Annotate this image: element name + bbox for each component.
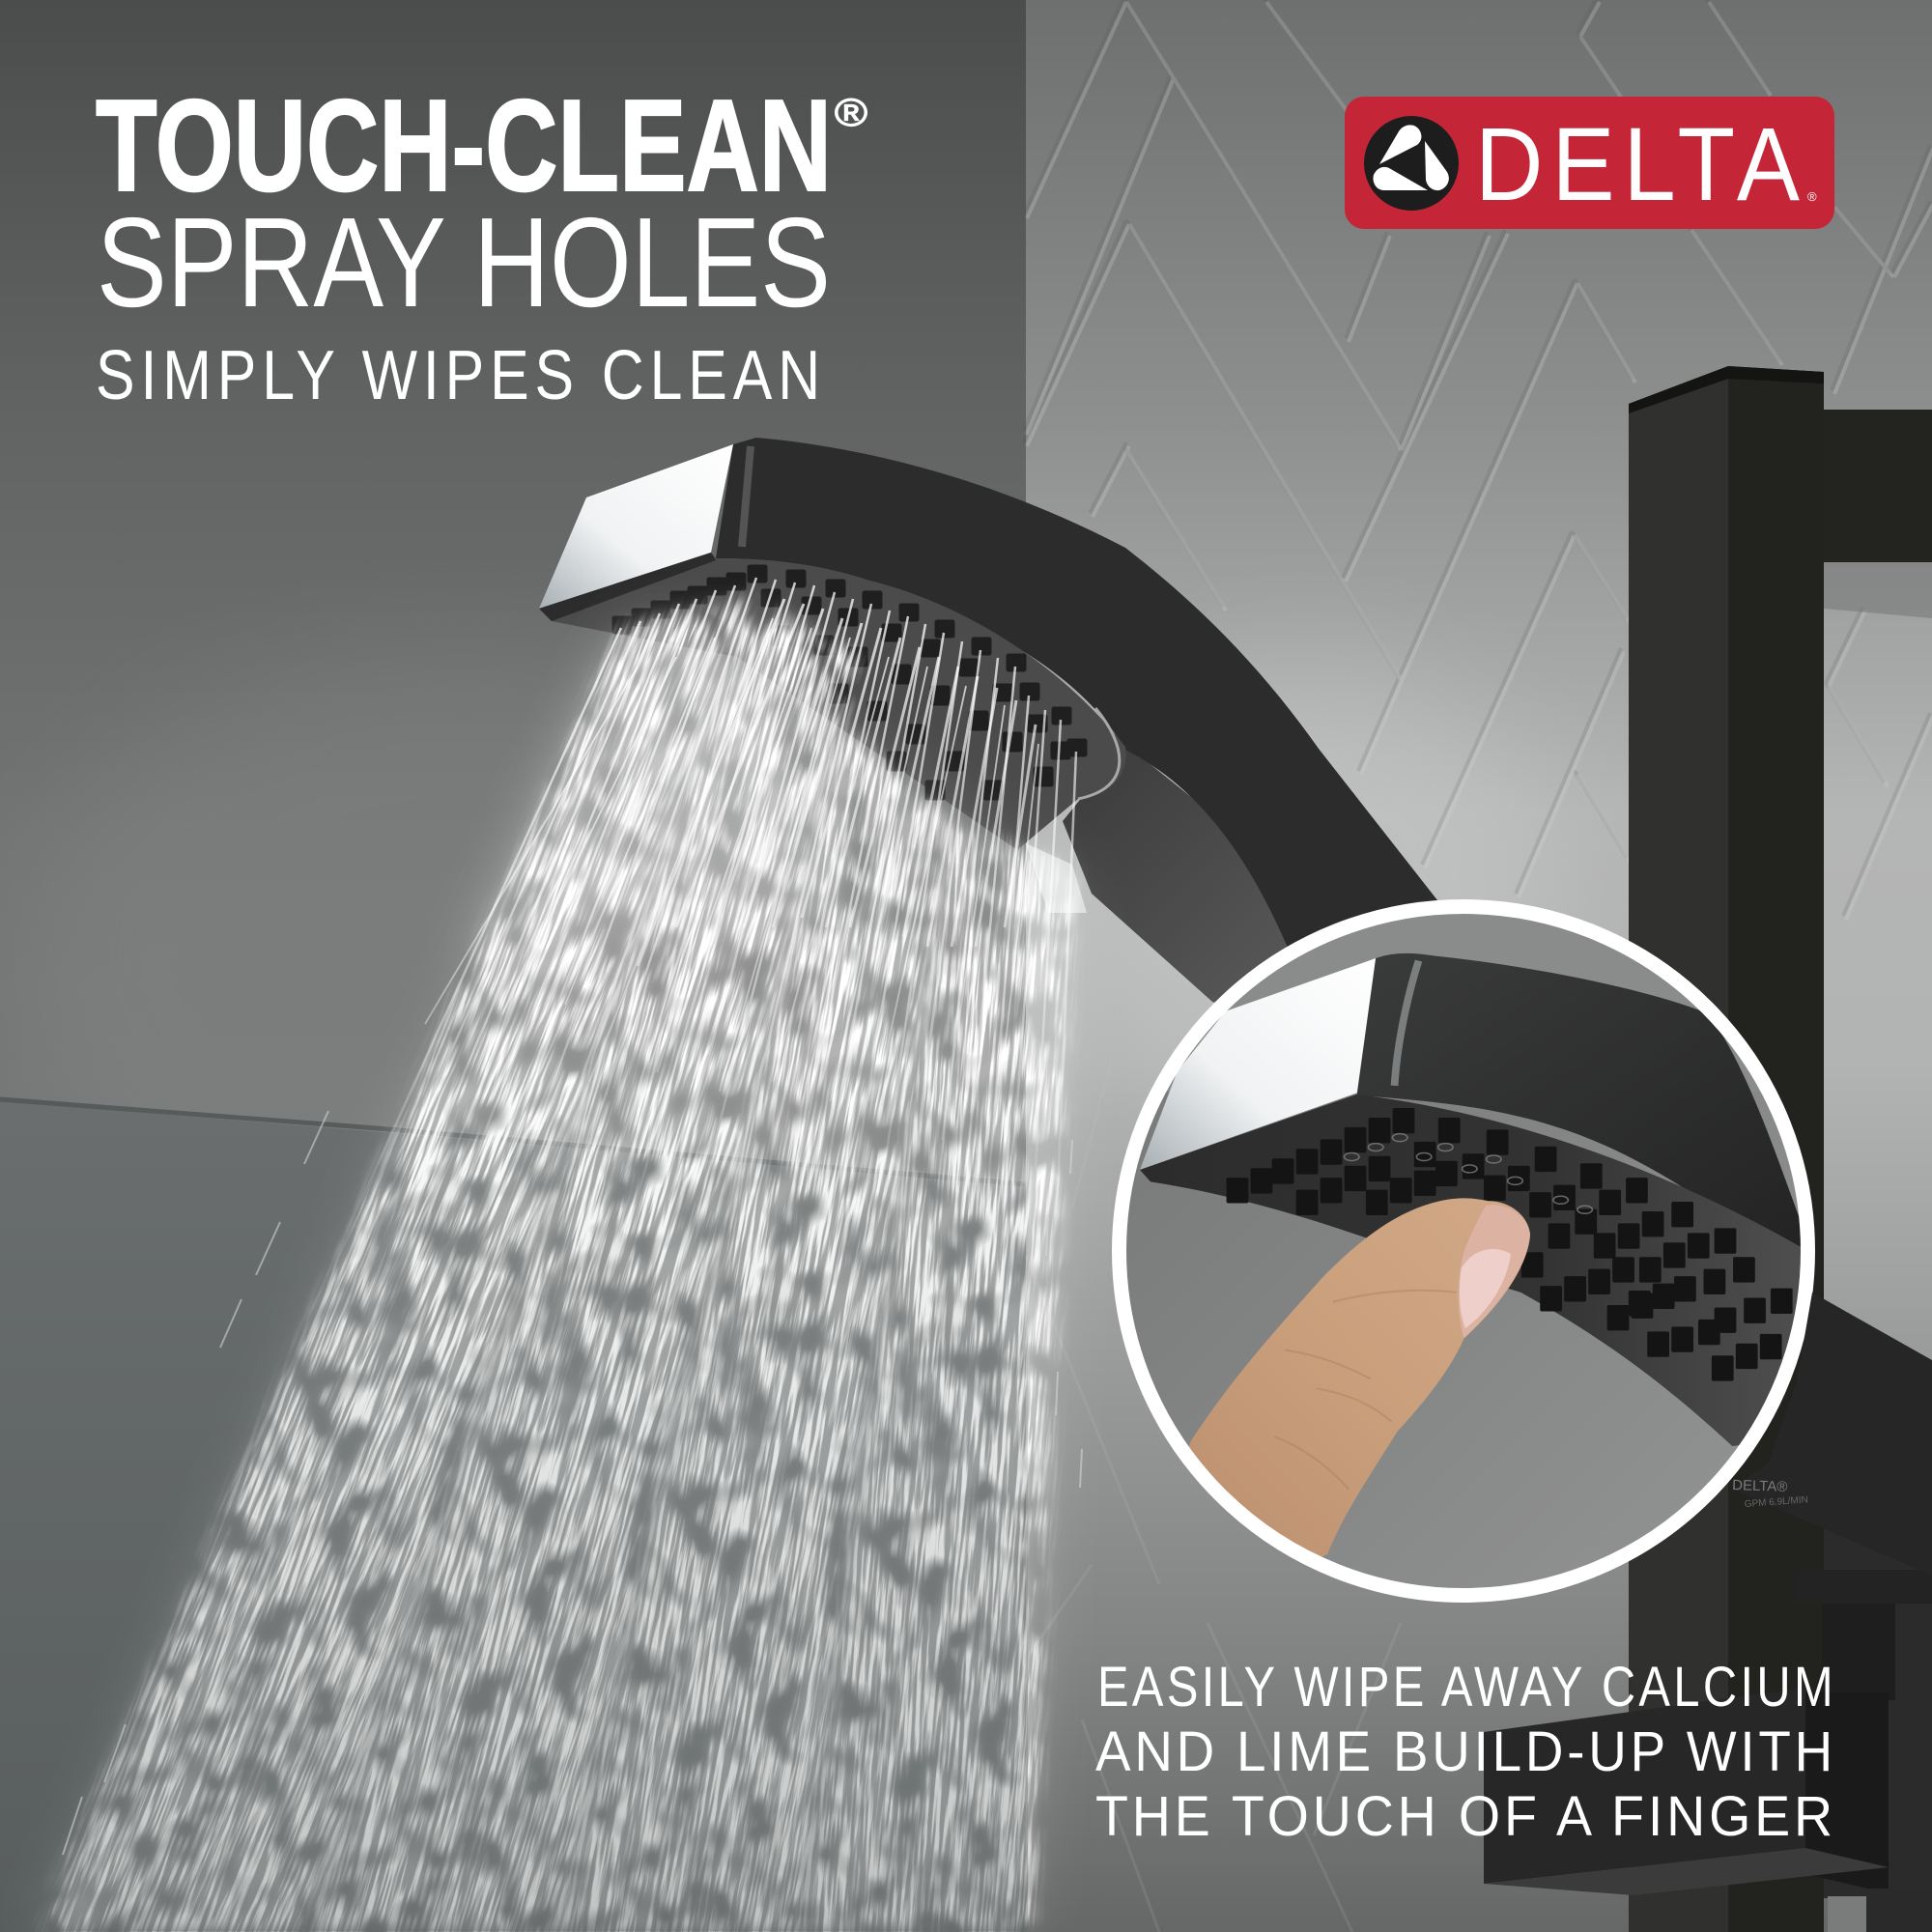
- inset magnifier circle: [1111, 898, 1816, 1604]
- caption: THE TOUCH OF A FINGER: [1095, 1785, 1836, 1848]
- title: TOUCH-CLEAN: [96, 72, 832, 218]
- inset: finger: [1188, 1198, 1530, 1557]
- arm below inset with engraved markings: DELTA®: [1732, 1477, 1788, 1495]
- caption: [1095, 1656, 1836, 1848]
- inset: nozzles: [1229, 1110, 1791, 1379]
- arm below inset with engraved markings: GPM 6.9L/MIN: [1744, 1494, 1808, 1510]
- inset: fingernail: [1459, 1205, 1530, 1338]
- lower bracket and hose connector: [1484, 1507, 1932, 1932]
- title: SPRAY HOLES: [97, 191, 831, 333]
- inset: underside of head: [1140, 1094, 1812, 1446]
- title: [96, 72, 867, 414]
- Delta logo badge: [1345, 97, 1834, 229]
- Delta logo badge: ®: [1807, 189, 1817, 204]
- tiled side wall: [1024, 0, 1932, 1932]
- back wall background: [0, 0, 1029, 1932]
- inset: highlight on head: [1395, 961, 1419, 1086]
- arm below inset with engraved markings: [1732, 1293, 1932, 1576]
- inset: dark head body: [1357, 953, 1812, 1254]
- logo mark: [1364, 116, 1459, 211]
- inset: chrome end cap: [1140, 958, 1376, 1170]
- caption: AND LIME BUILD-UP WITH: [1095, 1720, 1836, 1783]
- title: SIMPLY WIPES CLEAN: [96, 337, 826, 414]
- water spray: [38, 536, 1126, 1932]
- shower head: chrome end cap: [539, 444, 733, 609]
- shower head: spray face with nozzles: [539, 553, 1126, 913]
- shower post and wall arm: [1629, 366, 1932, 1932]
- shower head: arm: [716, 438, 1459, 1016]
- Delta logo badge: DELTA: [1475, 105, 1808, 222]
- title: ®: [835, 92, 867, 134]
